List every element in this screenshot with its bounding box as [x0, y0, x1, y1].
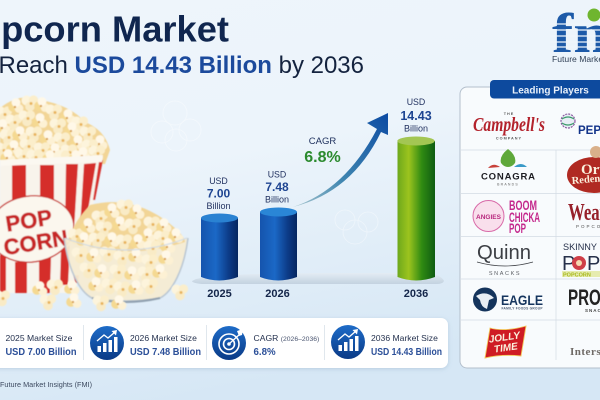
label: 2025 value: 7.00	[207, 186, 231, 200]
logo: Angie's Boomchickapop: BOOM	[509, 197, 537, 213]
logo: Campbell's: THE	[504, 112, 514, 116]
icon: growth chart 2036	[331, 325, 365, 359]
popcorn bucket illustration	[0, 95, 110, 293]
logo: Conagra: BRANDS	[497, 182, 519, 186]
label: 2026 value: 7.48	[265, 180, 289, 194]
logo: Angie's Boomchickapop: POP	[509, 220, 526, 236]
logo: Campbell's: Campbell's	[473, 114, 545, 136]
logo: Angie's Boomchickapop	[473, 197, 540, 236]
decorative popcorn watermark	[151, 101, 378, 244]
logo: Conagra	[481, 149, 535, 186]
stat: 2026 market size: 2026 Market Size	[130, 333, 197, 343]
CAGR callout	[304, 136, 341, 166]
panel: key statistics	[0, 318, 448, 368]
bar: 2026	[260, 208, 297, 280]
logo: Quinn Snacks	[477, 242, 533, 277]
panel: leading players	[460, 80, 600, 368]
title	[0, 8, 364, 79]
icon: growth chart 2026	[90, 326, 124, 360]
logo: SkinnyPop: P	[587, 253, 600, 275]
loose popcorn kernels	[0, 279, 188, 311]
label: 2026 value	[265, 170, 289, 204]
stat: 2036 market size	[371, 333, 442, 358]
logo: Jolly Time: TIME	[493, 341, 519, 356]
logo: SkinnyPop: SKINNY	[563, 242, 598, 253]
logo: SkinnyPop: POPCORN	[563, 272, 591, 278]
label: 2036 value	[400, 97, 432, 134]
label: 2036 value: USD	[407, 97, 425, 107]
icon: target	[212, 326, 246, 360]
stat: 2026 market size	[130, 333, 201, 358]
logo: Jolly Time: JOLLY	[488, 330, 522, 346]
bar chart	[192, 97, 444, 300]
logo: Conagra: CONAGRA	[481, 172, 535, 182]
stat: CAGR: 6.8%	[254, 347, 276, 358]
CAGR callout: 6.8%	[304, 149, 341, 166]
logo: SkinnyPop	[562, 242, 600, 278]
bucket label	[0, 190, 78, 268]
label: 2025 value	[206, 176, 231, 211]
logo: Eagle Family Foods: EAGLE	[501, 292, 543, 308]
logo: Quinn Snacks: Quinn	[477, 242, 531, 264]
logo: Angie's Boomchickapop: CHICKA	[509, 209, 540, 225]
header: leading players	[490, 80, 600, 98]
stat: 2025 market size: 2025 Market Size	[6, 333, 73, 343]
chart platform	[192, 273, 444, 284]
bucket body	[0, 157, 103, 293]
stat: 2026 market size: USD 7.48 Billion	[130, 347, 201, 358]
logo: Quinn Snacks: SNACKS	[489, 271, 521, 277]
bucket rim	[0, 155, 103, 166]
CAGR callout: CAGR	[309, 136, 336, 147]
bucket stripes	[0, 160, 103, 293]
subtitle: Reach USD 14.43 Billion by 2036	[0, 52, 364, 79]
label: 2025 value: Billion	[206, 201, 231, 211]
bar: 2025	[201, 214, 238, 280]
year labels	[207, 288, 428, 300]
logo: Eagle Family Foods	[473, 288, 543, 312]
label: 2025 value: USD	[209, 176, 228, 186]
header: leading players: Leading Players	[512, 86, 589, 96]
bucket label: POP	[4, 205, 54, 237]
logo: Angie's Boomchickapop: ANGIES	[476, 214, 502, 221]
stat: 2025 market size	[6, 333, 77, 358]
label: 2026 value: USD	[268, 170, 286, 180]
year labels: 2025	[207, 288, 232, 300]
stat: 2025 market size: USD 7.00 Billion	[6, 347, 77, 358]
stat: 2036 market size: USD 14.43 Billion	[371, 347, 442, 358]
year labels: 2026	[265, 288, 290, 300]
stat: CAGR	[254, 333, 319, 358]
logo: PepsiCo	[561, 114, 600, 137]
logo: Campbell's: COMPANY	[496, 136, 522, 140]
label: 2036 value: 14.43	[400, 109, 432, 123]
popcorn bowl	[64, 199, 188, 302]
logo: Orville Redenbacher's	[567, 146, 600, 193]
logo: Jolly Time	[485, 326, 526, 358]
bar: 2036	[397, 136, 435, 280]
stat: CAGR: CAGR (2026–2036)	[254, 333, 319, 343]
year labels: 2036	[404, 288, 428, 300]
logo: SkinnyPop: P	[562, 253, 575, 275]
label: 2036 value: Billion	[404, 124, 428, 134]
popcorn mound	[0, 95, 110, 166]
growth arrow	[293, 113, 388, 207]
stat: 2036 market size: 2036 Market Size	[371, 333, 438, 343]
logo: Eagle Family Foods: FAMILY FOODS GROUP	[502, 306, 543, 310]
logo: Campbell's	[473, 112, 545, 140]
bucket label: CORN	[2, 225, 70, 260]
label: 2026 value: Billion	[265, 194, 289, 204]
